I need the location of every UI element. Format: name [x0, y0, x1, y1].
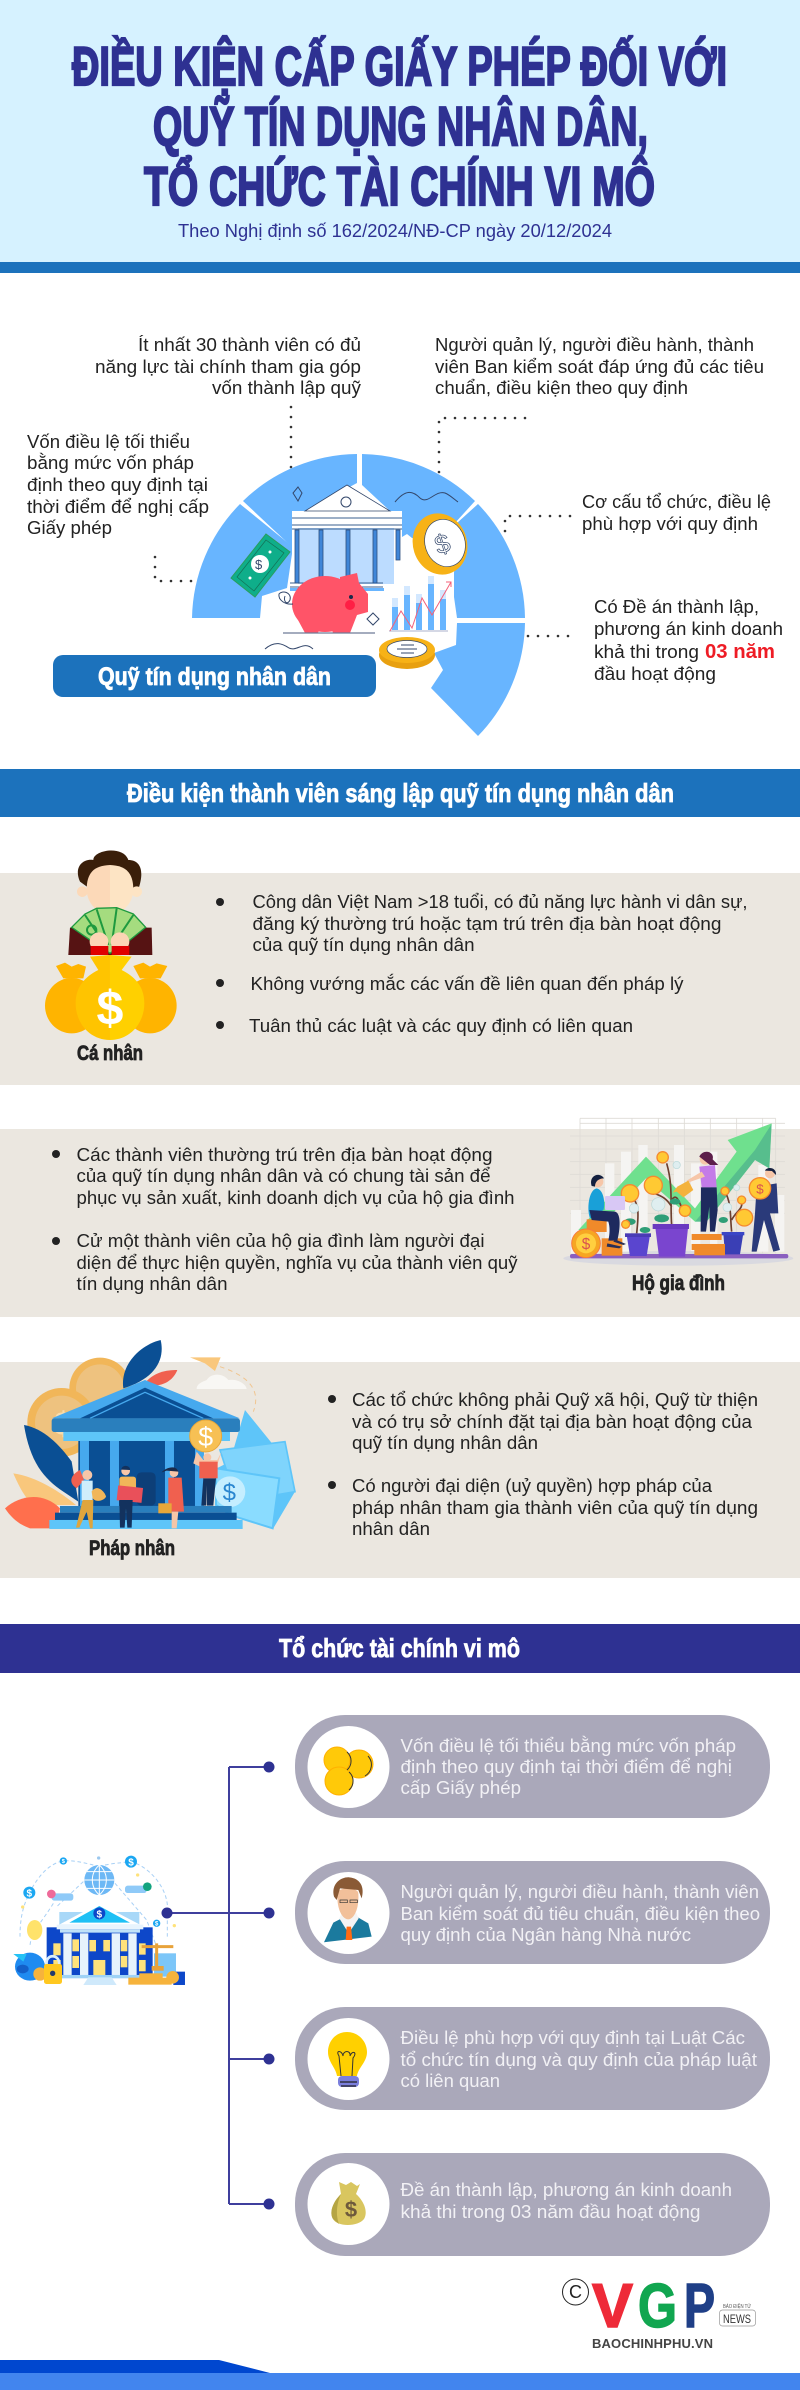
dotted leader lines: [155, 407, 578, 636]
sector: bottom right: [431, 623, 525, 736]
illustration: bank network: $: [155, 1922, 159, 1928]
text: 30 members: Ít nhất 30 thành viên có đủ: [138, 335, 361, 355]
bullet list: [328, 1390, 758, 1539]
illustration: bank network: $: [62, 1859, 66, 1865]
bullet list: [52, 1145, 518, 1294]
bullet list: Không vướng mắc các vấn đề liên quan đến pháp lý: [250, 973, 684, 994]
icon: large coin: [405, 506, 475, 582]
icon: large coin: $: [431, 527, 454, 560]
bullet list: [216, 892, 748, 1036]
illustration: family growing money: $: [756, 1181, 764, 1196]
bullet list: nhân dân: [352, 1519, 430, 1539]
bullet list: tín dụng nhân dân: [76, 1274, 228, 1294]
icon: bank building: [290, 485, 402, 591]
ring diagram: [192, 454, 525, 736]
illustration: bank with people: $: [198, 1422, 213, 1452]
text: managers: chuẩn, điều kiện theo quy định: [435, 378, 688, 398]
text: charter capital: Vốn điều lệ tối thiểu: [27, 432, 190, 452]
text: 30 members: [95, 335, 361, 398]
card: managers: [295, 1861, 770, 1964]
card: managers: Người quản lý, người điều hành, thành viên: [400, 1882, 759, 1902]
text: business plan: 03 năm: [705, 641, 775, 663]
bullet list: Công dân Việt Nam >18 tuổi, có đủ năng lực hành vi dân sự,: [252, 892, 748, 912]
text: business plan: [594, 597, 783, 684]
label pill: quỹ tín dụng nhân dân: Quỹ tín dụng nhân dân: [98, 663, 331, 691]
text: charter capital: thời điểm để nghị cấp: [27, 497, 209, 517]
bullet list: đăng ký thường trú hoặc tạm trú trên địa bàn hoạt động: [252, 914, 722, 934]
title: [72, 35, 727, 217]
sector: top left: [243, 454, 357, 547]
text: managers: viên Ban kiểm soát đáp ứng đủ các tiêu: [435, 357, 764, 377]
icon: piggy bank: [279, 573, 375, 633]
card: business plan: khả thi trong 03 năm đầu hoạt động: [400, 2202, 700, 2222]
card: charter capital: Vốn điều lệ tối thiểu bằng mức vốn pháp: [400, 1735, 736, 1756]
card: charter compliance: [295, 2007, 770, 2110]
text: managers: Người quản lý, người điều hành, thành: [435, 335, 754, 355]
icon: banknote: [231, 534, 290, 597]
logo: VGP News: BAOCHINHPHU.VN: [592, 2336, 713, 2351]
logo: VGP News: G: [638, 2272, 677, 2341]
bullet list: của quỹ tín dụng nhân dân: [252, 935, 474, 955]
card: charter capital: [295, 1715, 770, 1818]
icon: money bag: $: [345, 2197, 357, 2222]
bar chart: [389, 576, 451, 632]
illustration: family growing money: $: [582, 1236, 591, 1253]
illustration: family growing money: [563, 1118, 793, 1266]
panel: cá nhân: [0, 851, 800, 1085]
text: charter capital: [27, 432, 209, 538]
bullet list: của quỹ tín dụng nhân dân và có chung tài sản để: [76, 1166, 491, 1186]
text: organization: [582, 492, 771, 534]
label pill: quỹ tín dụng nhân dân: [53, 655, 376, 697]
text: business plan: phương án kinh doanh: [594, 619, 783, 639]
logo: VGP News: V: [592, 2272, 633, 2341]
bullet list: Cử một thành viên của hộ gia đình làm người đại: [76, 1231, 484, 1251]
bullet list: Các tổ chức không phải Quỹ xã hội, Quỹ từ thiện: [352, 1390, 758, 1410]
text: charter capital: Giấy phép: [27, 518, 112, 538]
text: charter capital: bằng mức vốn pháp: [27, 452, 194, 473]
bullet list: pháp nhân tham gia thành viên của quỹ tín dụng: [352, 1498, 758, 1518]
icon: small coin: [379, 637, 435, 669]
card: managers: quy định của Ngân hàng Nhà nước: [400, 1925, 691, 1945]
bullet list: phục vụ sản xuất, kinh doanh dịch vụ của hộ gia đình: [76, 1188, 514, 1208]
card: business plan: Đề án thành lập, phương án kinh doanh: [400, 2180, 732, 2200]
bullet list: Tuân thủ các luật và các quy định có liên quan: [249, 1016, 633, 1036]
text: business plan: khả thi trong: [594, 642, 699, 662]
logo: VGP News: [562, 2272, 756, 2351]
illustration: bank network: $: [128, 1857, 134, 1868]
panel: hộ gia đình: [0, 1118, 800, 1317]
header banner: [0, 0, 800, 273]
text: managers: [435, 335, 764, 398]
sector: top right: [362, 454, 475, 545]
subtitle: Theo Nghị định số 162/2024/NĐ-CP ngày 20/12/2024: [178, 221, 612, 241]
illustration: person with money: $: [97, 981, 124, 1035]
logo: VGP News: C: [569, 2282, 582, 2302]
panel: pháp nhân: [0, 1340, 800, 1578]
bullet list: Có người đại diện (uỷ quyền) hợp pháp của: [352, 1476, 713, 1496]
illustration: person with money: [45, 851, 177, 1040]
bullet list: và có trụ sở chính đặt tại địa bàn hoạt động của: [352, 1412, 753, 1432]
text: business plan: Có Đề án thành lập,: [594, 597, 759, 617]
section heading: microfinance: [0, 1624, 800, 1673]
label: pháp nhân: Pháp nhân: [89, 1537, 175, 1560]
sector: left: [192, 504, 293, 618]
label: cá nhân: Cá nhân: [77, 1042, 143, 1065]
icon: banknote: $: [255, 557, 263, 572]
label: hộ gia đình: Hộ gia đình: [632, 1272, 725, 1295]
card: charter compliance: Điều lệ phù hợp với quy định tại Luật Các: [400, 2028, 745, 2048]
card: charter capital: định theo quy định tại thời điểm để nghị: [400, 1757, 732, 1777]
illustration: bank network: $: [27, 1888, 33, 1899]
card: managers: Ban kiểm soát đủ tiêu chuẩn, điều kiện theo: [400, 1904, 760, 1924]
sector: right: [454, 504, 525, 618]
section heading: founding members: [0, 769, 800, 817]
card: charter compliance: tổ chức tín dụng và quy định của pháp luật: [400, 2050, 757, 2070]
illustration: bank network: $: [97, 1909, 103, 1920]
connector tree: [162, 1762, 274, 2210]
illustration: bank with people: $: [54, 1406, 73, 1443]
text: business plan: đầu hoạt động: [594, 664, 716, 684]
decorative sparkles and waves: [265, 487, 458, 649]
icon: light bulb: [328, 2032, 367, 2087]
logo: VGP News: NEWS: [723, 2312, 751, 2326]
footer bar: [0, 2360, 800, 2390]
bullet list: Các thành viên thường trú trên địa bàn hoạt động: [76, 1145, 492, 1165]
logo: VGP News: P: [684, 2272, 715, 2341]
text: 30 members: vốn thành lập quỹ: [212, 378, 361, 398]
illustration: bank network: [13, 1856, 185, 1985]
text: organization: phù hợp với quy định: [582, 514, 758, 534]
icon: manager portrait: [324, 1877, 372, 1942]
card: charter capital: cấp Giấy phép: [400, 1778, 521, 1798]
section heading: microfinance: Tổ chức tài chính vi mô: [279, 1633, 520, 1663]
illustration: bank with people: $: [223, 1480, 236, 1507]
logo: VGP News: BÁO ĐIỆN TỬ: [723, 2302, 752, 2310]
text: organization: Cơ cấu tổ chức, điều lệ: [582, 492, 771, 512]
text: 30 members: năng lực tài chính tham gia góp: [95, 357, 361, 377]
card: charter compliance: có liên quan: [400, 2071, 500, 2091]
bullet list: quỹ tín dụng nhân dân: [352, 1433, 538, 1453]
bullet list: diện để thực hiện quyền, nghĩa vụ của thành viên quỹ: [76, 1253, 518, 1273]
text: charter capital: định theo quy định tại: [27, 475, 208, 495]
section heading: founding members: Điều kiện thành viên sáng lập quỹ tín dụng nhân dân: [127, 778, 674, 808]
illustration: bank with people: [5, 1340, 295, 1529]
icon: money bag: [331, 2182, 366, 2225]
card: business plan: [295, 2153, 770, 2256]
icon: gold coins: [324, 1747, 373, 1795]
